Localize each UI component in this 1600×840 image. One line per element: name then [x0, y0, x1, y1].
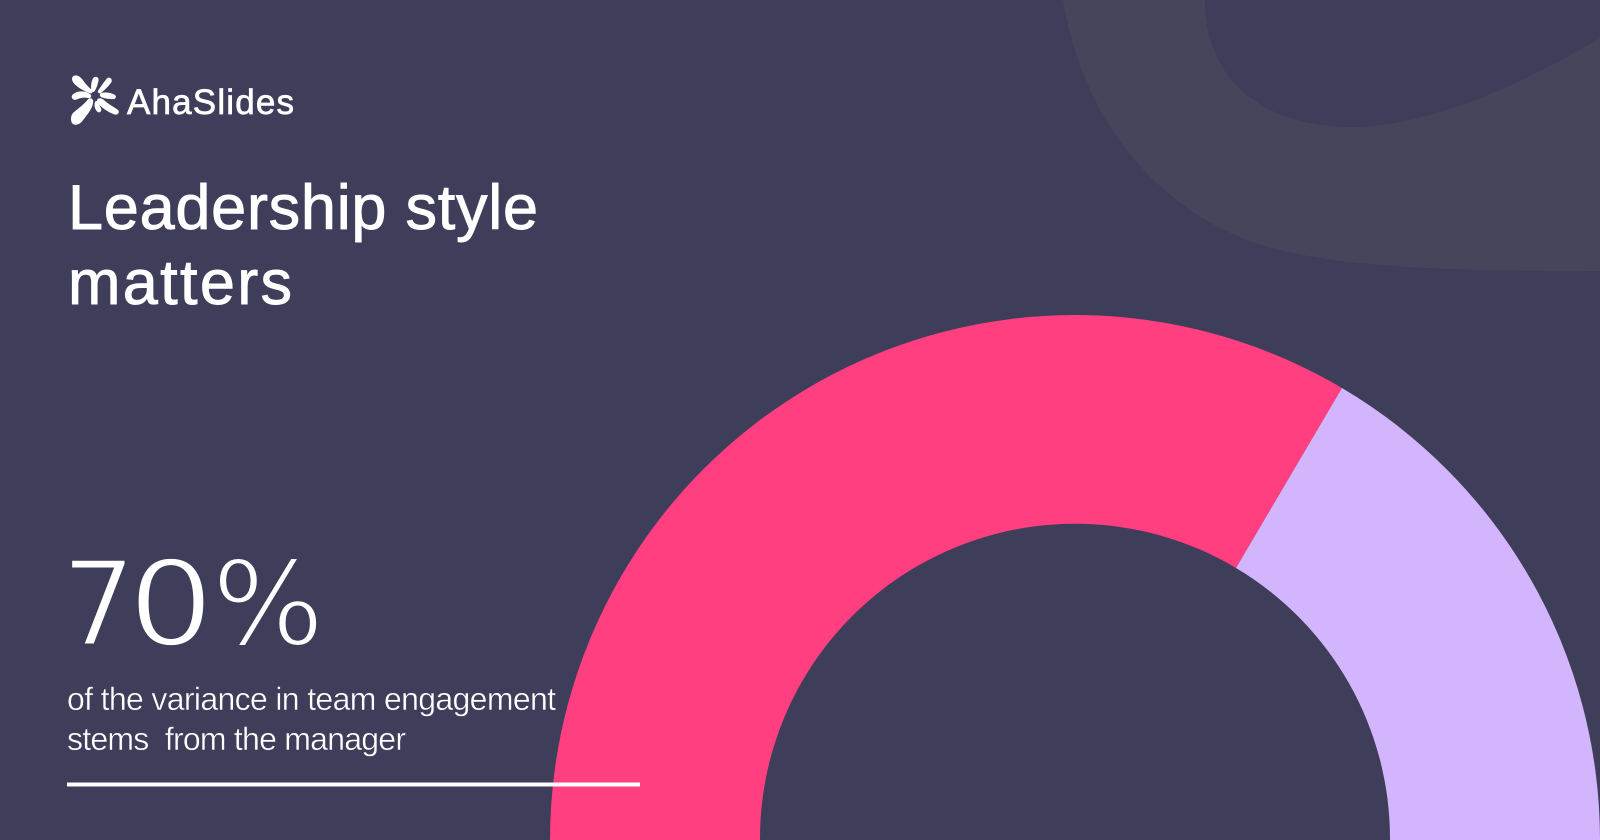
- logo: [71, 76, 294, 124]
- donut chart: [550, 315, 1600, 840]
- donut segment: 30% lilac: [1236, 388, 1600, 840]
- icon: AhaSlides splash mark: [71, 76, 118, 124]
- big statistic: 7: [61, 535, 136, 673]
- big statistic: %: [212, 535, 324, 673]
- decorative background swoosh: [1063, 0, 1600, 271]
- big statistic: 0: [128, 535, 214, 673]
- statistic description: [67, 681, 556, 757]
- donut segment: 70% pink: [550, 315, 1342, 840]
- title: [68, 173, 538, 318]
- title: matters: [68, 248, 292, 318]
- underline rule: [67, 782, 640, 786]
- title: Leadership style: [68, 173, 538, 243]
- statistic description: stems from the manager: [67, 721, 406, 757]
- statistic description: of the variance in team engagement: [67, 681, 556, 717]
- logo wordmark: AhaSlides: [127, 83, 294, 122]
